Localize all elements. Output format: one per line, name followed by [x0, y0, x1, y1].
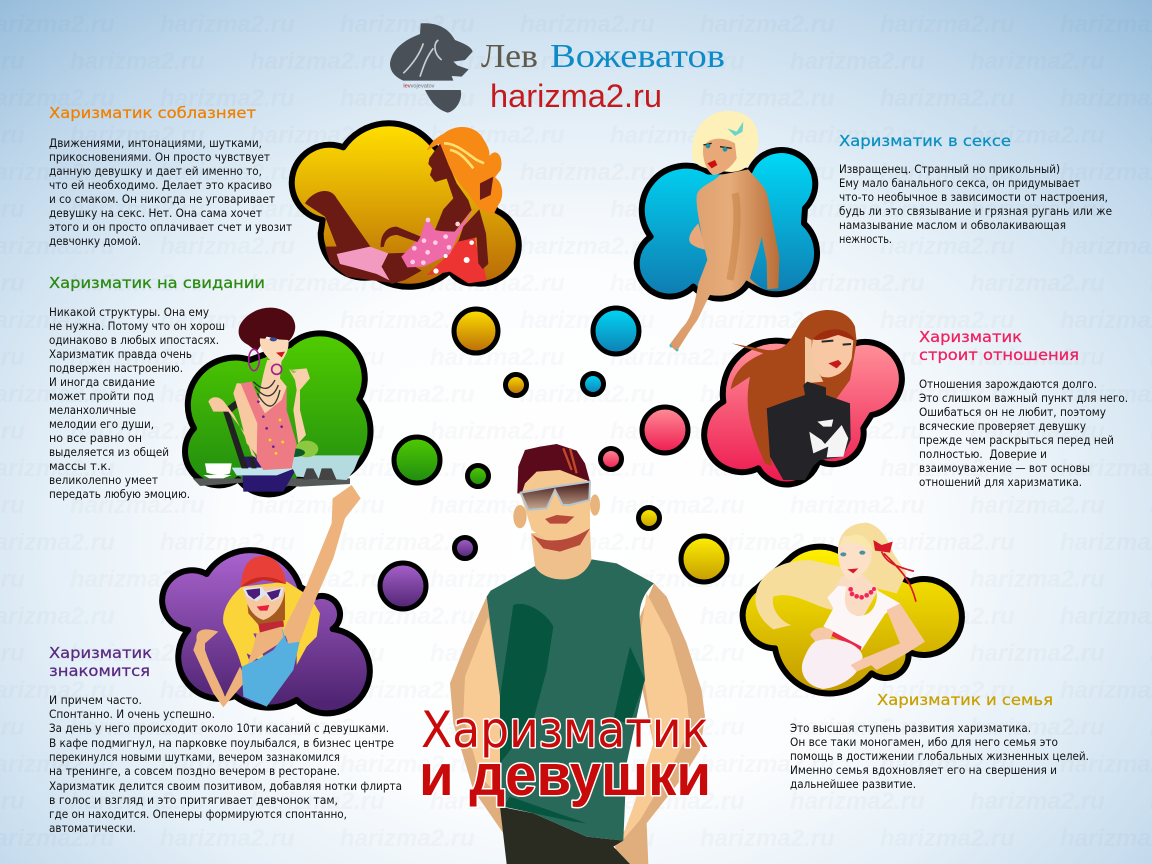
text block: on a date: одинаково в любых ипостасях. — [49, 333, 219, 347]
text block: in sex: Ему мало банального секса, он придумывает — [839, 176, 1080, 190]
logo: author name: Лев — [481, 38, 538, 75]
heading: builds relationships — [919, 328, 1079, 364]
cloud illustration: pregnant blonde — [743, 523, 962, 693]
text block: gets acquainted: И причем часто. — [49, 693, 142, 707]
text block: gets acquainted: Спонтанно. И очень успешно. — [49, 707, 215, 721]
thought bubbles — [380, 308, 727, 609]
main title: и девушки — [419, 743, 711, 808]
text block: in sex: будь ли это связывание и грязная ругань или же — [839, 204, 1112, 218]
text block: gets acquainted: в голос и взгляд и это притягивает девчонок там, — [49, 793, 338, 807]
heading: gets acquainted: знакомится — [49, 662, 150, 680]
cloud illustration: long-haired woman in black — [704, 310, 902, 484]
man: sleeveless shirt — [487, 559, 654, 841]
central man illustration — [450, 444, 705, 864]
text block: in sex — [839, 132, 1112, 246]
text block: seduces — [49, 104, 292, 248]
text block: builds relationships: взаимоуважение — вот основы — [919, 461, 1090, 475]
text block: family: Он все таки моногамен, ибо для него семья это — [790, 735, 1058, 749]
logo: site name: harizma2.ru — [490, 78, 662, 114]
text block: gets acquainted: За день у него происходит около 10ти касаний с девушками. — [49, 721, 389, 735]
text block: on a date: выделяется из общей — [49, 445, 169, 459]
heading: builds relationships: Харизматик — [919, 328, 1022, 346]
text block: family: дальнейшее развитие. — [790, 777, 916, 791]
man: head — [520, 463, 590, 543]
text block: builds relationships: прежде чем раскрыться перед ней — [919, 433, 1114, 447]
cloud illustration: blonde seen from behind — [637, 111, 817, 352]
text block: in sex: что-то необычное в зависимости от настроения, — [839, 190, 1108, 204]
heading: in sex: Харизматик в сексе — [839, 132, 1011, 150]
text block: on a date: может пройти под — [49, 389, 154, 403]
text block: on a date: меланхоличные — [49, 403, 136, 417]
text block: on a date: передать любую эмоцию. — [49, 487, 190, 501]
text block: builds relationships: полностью. Доверие и — [919, 447, 1047, 461]
heading: seduces: Харизматик соблазняет — [49, 104, 256, 122]
text block: seduces: что ей необходимо. Делает это красиво — [49, 178, 272, 192]
text block: on a date: И иногда свидание — [49, 375, 155, 389]
heading: builds relationships: строит отношения — [919, 346, 1079, 364]
text block: gets acquainted: где он находится. Опенеры формируются спонтанно, — [49, 807, 347, 821]
text block: family: Это высшая ступень развития харизматика. — [790, 721, 1031, 735]
text block: gets acquainted — [49, 644, 402, 835]
text block: gets acquainted: В кафе подмигнул, на парковке поулыбался, в бизнес центре — [49, 736, 394, 750]
cloud illustration: woman at cafe table — [185, 308, 371, 494]
text block: seduces: данную девушку и дает ей именно то, — [49, 164, 262, 178]
text block: on a date: массы т.к. — [49, 459, 111, 473]
text block: in sex: намазывание маслом и обволакивающая — [839, 218, 1066, 232]
text block: gets acquainted: Харизматик делится своим позитивом, добавляя нотки флирта — [49, 779, 402, 793]
text block: on a date: не нужна. Потому что он хорош — [49, 319, 225, 333]
text block: seduces: этого и он просто оплачивает счет и увозит — [49, 220, 292, 234]
text block: builds relationships: Отношения зарождаются долго. — [919, 377, 1097, 391]
logo: lion head — [390, 23, 473, 113]
man: arms — [450, 597, 503, 833]
text block: gets acquainted: перекинулся новыми шутками, вечером зазнакомился — [49, 750, 340, 764]
text block: family: помощь в достижении глобальных жизненных целей. — [790, 749, 1089, 763]
cloud illustration: seducing woman — [292, 123, 519, 287]
logo: author name: Вожеватов — [550, 38, 725, 75]
heading: family: Харизматик и семья — [877, 691, 1053, 709]
text block: on a date: великолепно умеет — [49, 473, 158, 487]
text block: builds relationships: отношений для харизматика. — [919, 475, 1082, 489]
text block: on a date — [49, 274, 265, 501]
man: trousers — [500, 807, 630, 864]
heading: gets acquainted: Харизматик — [49, 644, 152, 662]
text block: on a date: Харизматик правда очень — [49, 347, 192, 361]
text block: on a date: мелодии его души, — [49, 417, 154, 431]
main title — [419, 701, 711, 808]
text block: seduces: прикосновениями. Он просто чувствует — [49, 150, 270, 164]
text block: builds relationships — [919, 328, 1128, 489]
text block: builds relationships: Ошибаться он не любит, поэтому — [919, 405, 1106, 419]
text block: in sex: Извращенец. Странный но прикольный) — [839, 162, 1060, 176]
text block: gets acquainted: автоматически. — [49, 821, 136, 835]
text block: in sex: нежность. — [839, 232, 892, 246]
text block: family: Именно семья вдохновляет его на свершения и — [790, 763, 1057, 777]
man: sunglasses — [521, 482, 590, 510]
text block: builds relationships: Это слишком важный пункт для него. — [919, 391, 1128, 405]
text block: on a date: Никакой структуры. Она ему — [49, 305, 209, 319]
heading: gets acquainted — [49, 644, 152, 680]
logo: author name — [481, 38, 725, 75]
text block: seduces: девчонку домой. — [49, 234, 141, 248]
cloud illustration: woman in red cap waving — [162, 485, 370, 713]
text block: on a date: подвержен настроению. — [49, 361, 183, 375]
text block: family — [790, 691, 1089, 791]
text block: gets acquainted: на тренинге, а совсем поздно вечером в ресторане. — [49, 764, 340, 778]
text block: builds relationships: всяческие проверяет девушку — [919, 419, 1086, 433]
heading: on a date: Харизматик на свидании — [49, 274, 265, 292]
text block: seduces: и со смаком. Он никогда не уговаривает — [49, 192, 275, 206]
text block: seduces: Движениями, интонациями, шутками, — [49, 136, 262, 150]
man: hair — [517, 444, 590, 493]
man: neck — [531, 528, 592, 583]
main title: Харизматик — [421, 701, 709, 759]
logo: lion head: levvojevatov — [403, 83, 435, 89]
text block: seduces: девушку на секс. Нет. Она сама хочет — [49, 206, 262, 220]
text block: on a date: но все равно он — [49, 431, 142, 445]
